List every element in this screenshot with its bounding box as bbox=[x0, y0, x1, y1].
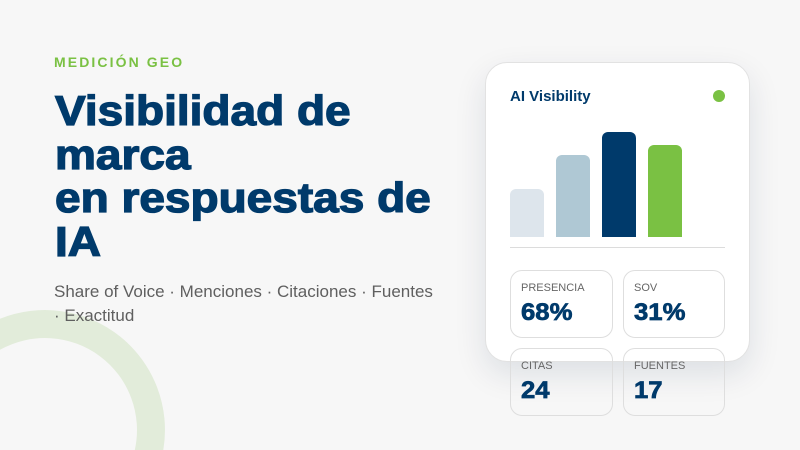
bar chart bbox=[510, 132, 682, 237]
metric: sov: 31% bbox=[634, 299, 685, 326]
metric: citas bbox=[510, 348, 613, 416]
bar 1 bbox=[510, 189, 544, 237]
metric: presencia: 68% bbox=[521, 299, 572, 326]
metric: citas: 24 bbox=[521, 377, 550, 404]
icon: status dot bbox=[713, 90, 725, 102]
subtitle bbox=[54, 282, 433, 325]
metric: fuentes: FUENTES bbox=[634, 360, 685, 372]
title: marca bbox=[54, 130, 190, 178]
panel: AI Visibility card bbox=[485, 62, 750, 362]
decorative ring bbox=[0, 310, 165, 450]
metric: presencia: PRESENCIA bbox=[521, 282, 585, 294]
chart baseline bbox=[510, 247, 725, 248]
bar 4 bbox=[648, 145, 682, 237]
eyebrow label: MEDICIÓN GEO bbox=[54, 54, 184, 70]
bar 3 bbox=[602, 132, 636, 237]
metric: presencia bbox=[510, 270, 613, 338]
title: Visibilidad de bbox=[54, 87, 350, 134]
metric: fuentes: 17 bbox=[634, 377, 663, 404]
title: en respuestas de bbox=[54, 174, 430, 221]
subtitle: · Exactitud bbox=[54, 306, 134, 325]
metric: sov: SOV bbox=[634, 282, 657, 294]
metric: fuentes bbox=[623, 348, 725, 416]
metric: sov bbox=[623, 270, 725, 338]
title: IA bbox=[54, 218, 100, 264]
bar 2 bbox=[556, 155, 590, 237]
title bbox=[54, 87, 430, 264]
card heading: AI Visibility bbox=[510, 88, 591, 105]
metric: citas: CITAS bbox=[521, 360, 553, 372]
subtitle: Share of Voice · Menciones · Citaciones · Fuentes bbox=[54, 282, 433, 301]
